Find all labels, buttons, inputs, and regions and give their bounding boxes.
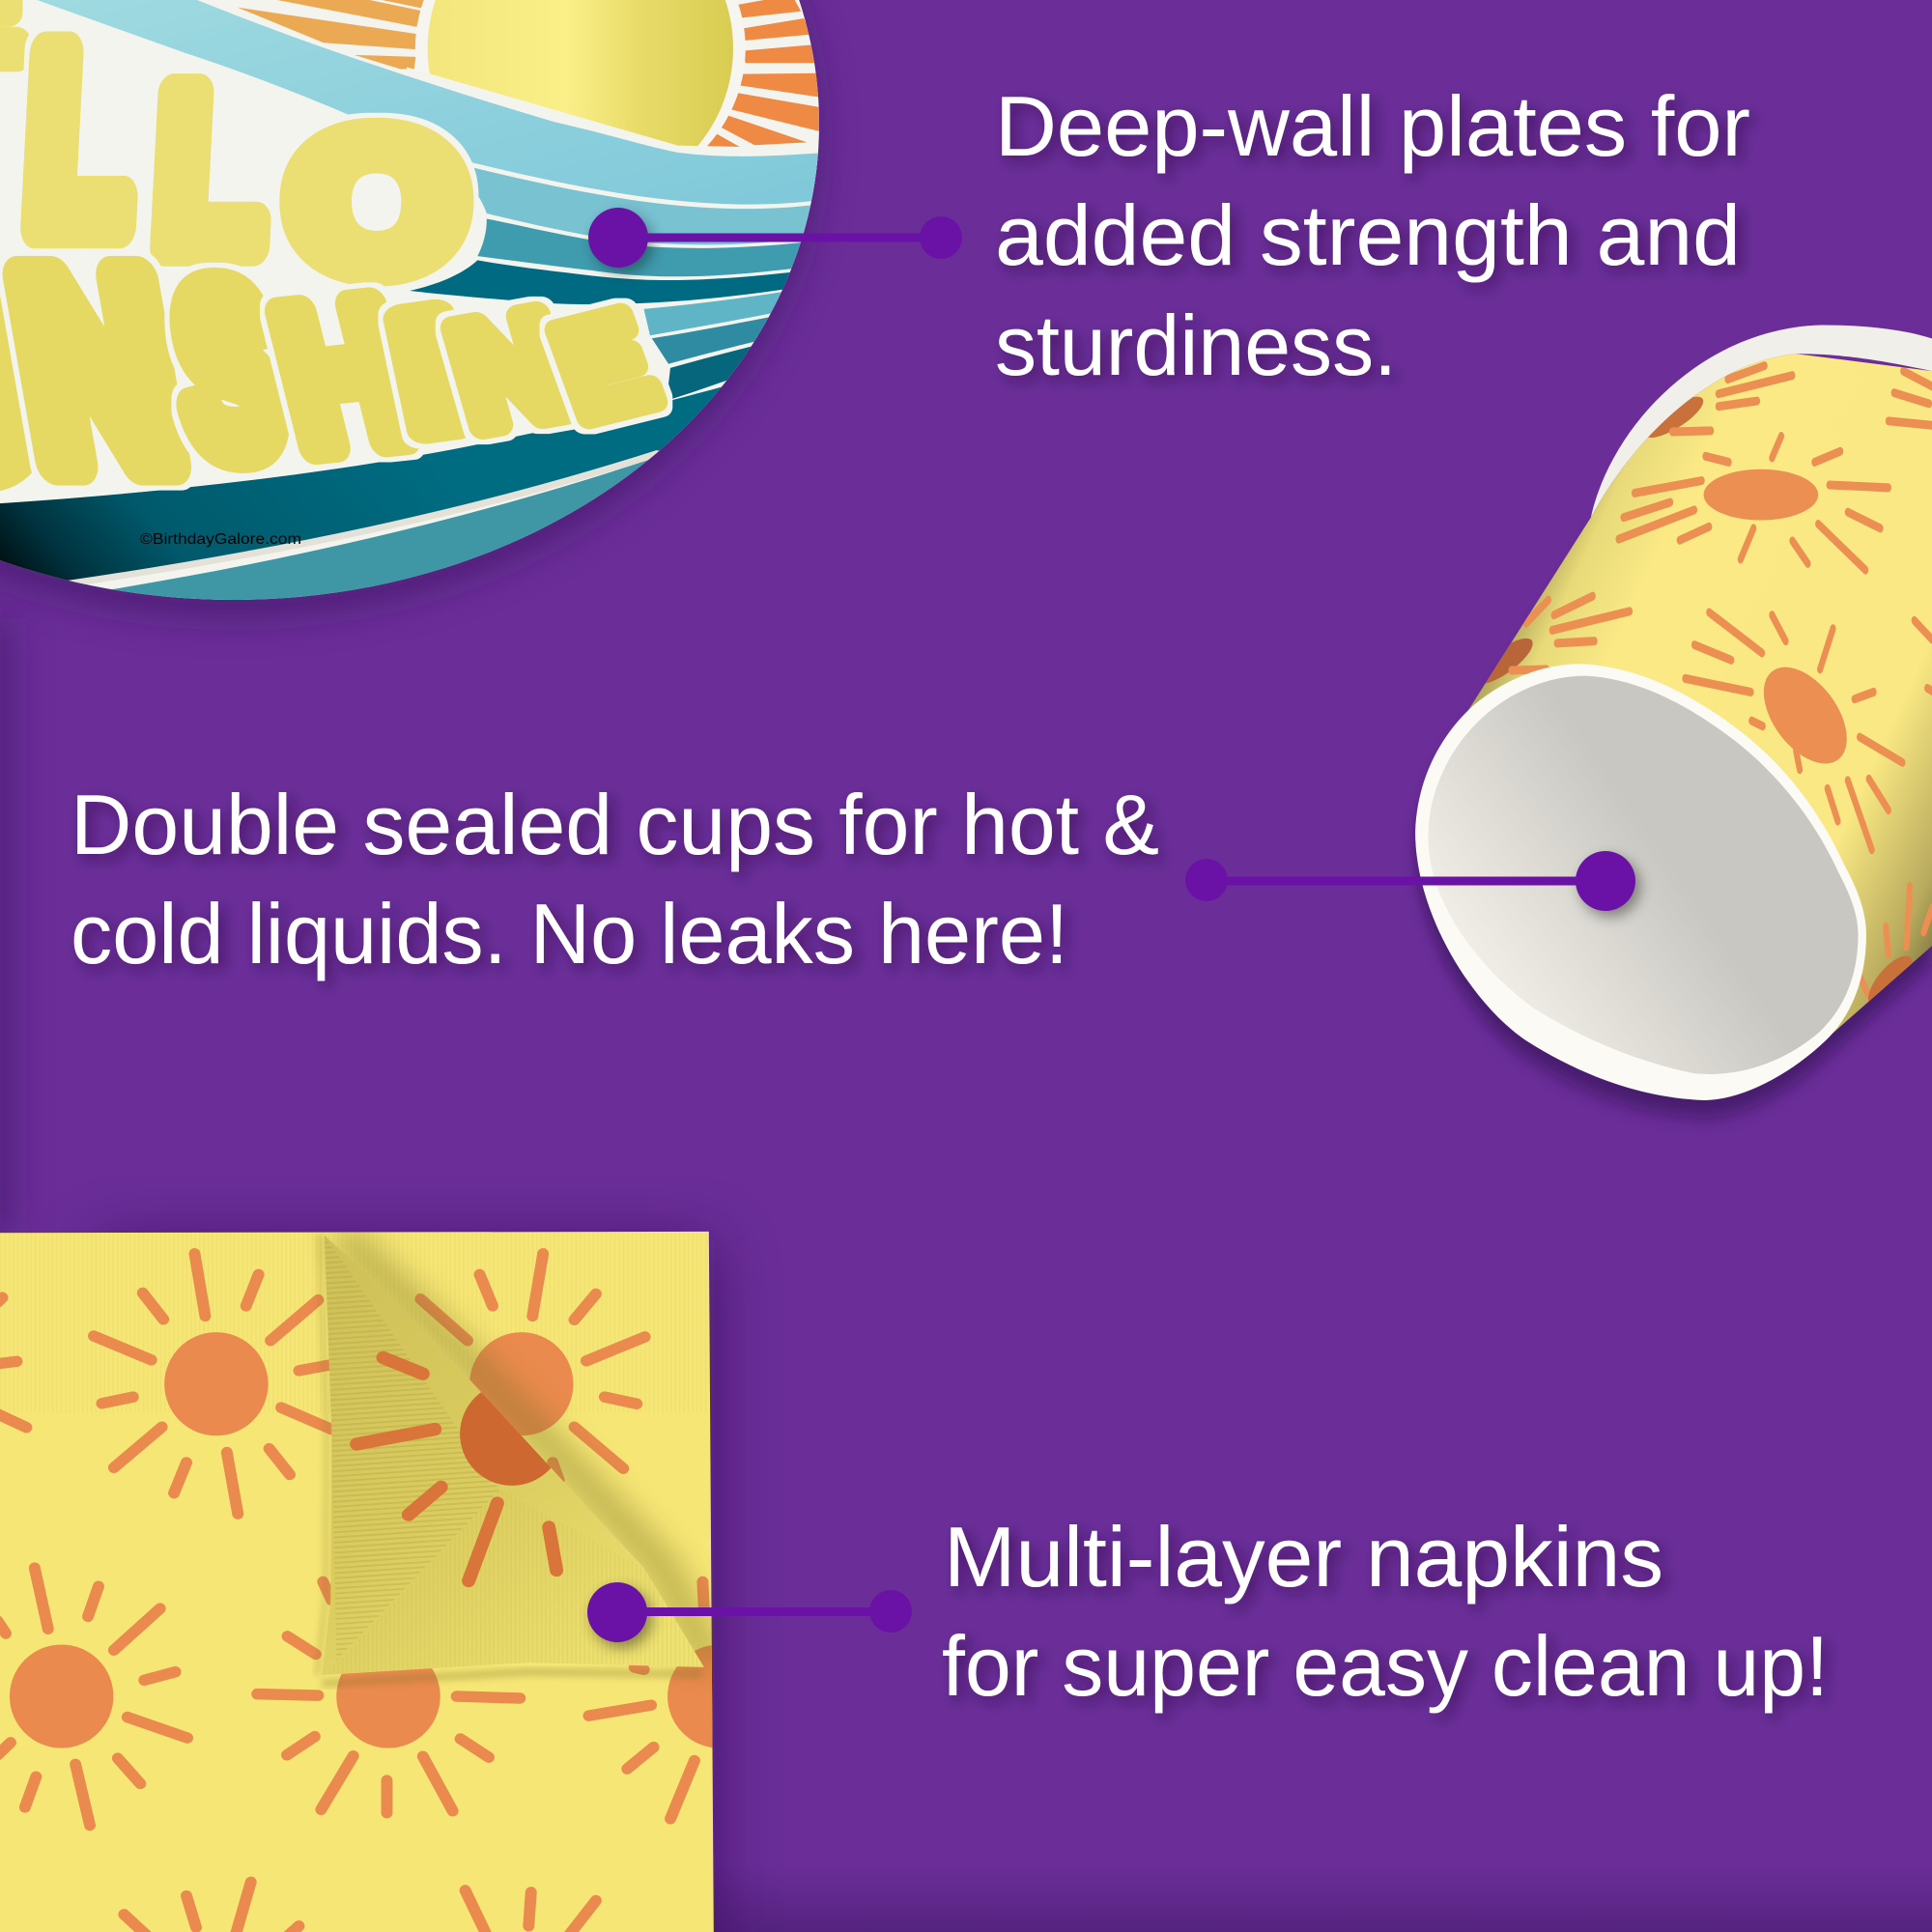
plate: Hello Sunshine paper plate [0, 0, 860, 628]
text: double sealed cups [71, 777, 1159, 981]
plate lettering: Hello Sunshine: H [259, 262, 427, 490]
plate lettering: Hello Sunshine [0, 0, 670, 524]
plate lettering: Hello Sunshine: N [0, 223, 196, 519]
text: multi-layer napkins: Multi-layer napkins [944, 1509, 1663, 1605]
plate lettering: Hello Sunshine: L [21, 0, 138, 279]
plate wave bands [0, 0, 826, 610]
plate lettering: Hello Sunshine: E [538, 286, 670, 447]
plate sun disc [415, 0, 746, 147]
cup: paper cup with sun pattern [1415, 325, 1932, 1100]
napkin sun pattern [0, 1254, 771, 1932]
napkin fold shadow [317, 1236, 711, 1684]
cup body [1463, 354, 1932, 1046]
text: double sealed cups: cold liquids. No leaks here! [71, 886, 1068, 981]
text: multi-layer napkins: for super easy clean up! [942, 1618, 1829, 1714]
plate drop shadow [0, 0, 819, 617]
cup base rim [1415, 664, 1866, 1100]
text: deep-wall plates: sturdiness. [995, 298, 1397, 393]
plate lettering: Hello Sunshine: I [381, 277, 480, 466]
plate lettering: Hello Sunshine: L [152, 44, 270, 294]
text: double sealed cups: Double sealed cups for hot & [71, 777, 1159, 872]
text: deep-wall plates [995, 78, 1750, 393]
text: deep-wall plates: Deep-wall plates for [995, 78, 1750, 174]
napkin folded corner [322, 1236, 704, 1675]
plate lettering: Hello Sunshine: S [162, 241, 295, 499]
cup drop shadow [1415, 388, 1932, 1118]
plate copyright: ©BirthdayGalore.com [140, 531, 301, 548]
plate sun rays [238, 0, 822, 149]
plate lettering: Hello Sunshine: N [436, 283, 584, 459]
connector: plate callout [588, 208, 962, 273]
napkin: folded sun napkin [0, 1232, 771, 1932]
cup base inner face [1428, 676, 1859, 1074]
napkin drop shadow [97, 1241, 715, 1932]
text: multi-layer napkins [942, 1509, 1829, 1714]
plate lettering: Hello Sunshine: O [291, 96, 463, 308]
connector: napkin callout [587, 1582, 912, 1648]
cup sun pattern [1472, 366, 1932, 1015]
text: deep-wall plates: added strength and [995, 187, 1741, 283]
connector: cup callout [1185, 851, 1640, 917]
cup rim [1591, 325, 1932, 518]
napkin ribbed band [0, 1233, 709, 1413]
